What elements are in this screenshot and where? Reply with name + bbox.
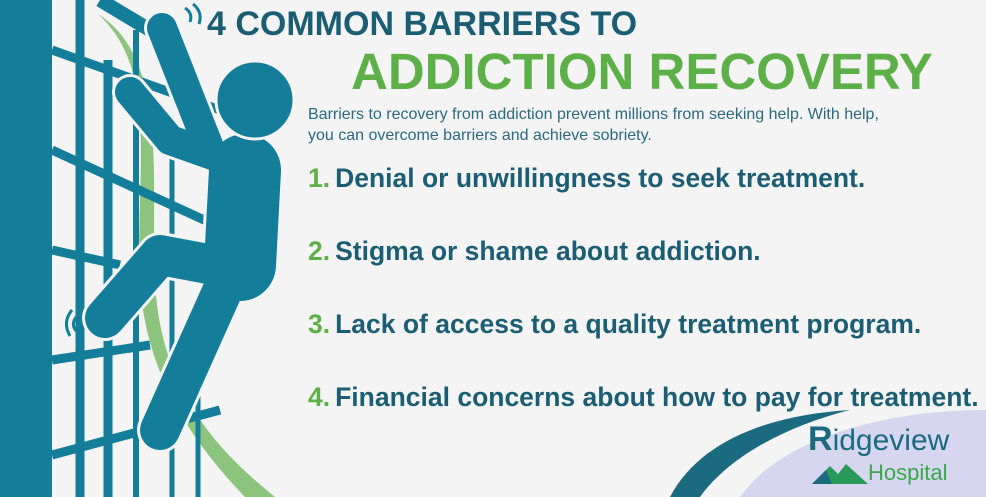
item 4: 4.Financial concerns about how to pay for treatment. bbox=[308, 382, 979, 412]
title line 2: ADDICTION RECOVERY bbox=[351, 43, 933, 100]
item 2: 2.Stigma or shame about addiction. bbox=[308, 236, 761, 266]
illustration: climber on wall bbox=[0, 0, 292, 497]
item 3: 3.Lack of access to a quality treatment program. bbox=[308, 309, 921, 339]
subtitle bbox=[308, 106, 879, 144]
logo bbox=[808, 420, 950, 485]
logo: Hospital bbox=[868, 460, 947, 485]
title line 1: 4 COMMON BARRIERS TO bbox=[207, 5, 637, 43]
bottom-right swoosh bbox=[670, 410, 986, 497]
subtitle: Barriers to recovery from addiction prevent millions from seeking help. With help, bbox=[308, 106, 879, 123]
wall pillar bbox=[0, 0, 52, 497]
subtitle: you can overcome barriers and achieve sobriety. bbox=[308, 127, 652, 144]
figure bbox=[105, 28, 245, 430]
item 1: 1.Denial or unwillingness to seek treatment. bbox=[308, 163, 865, 193]
green swoosh bbox=[98, 14, 275, 497]
logo: Ridgeview bbox=[808, 420, 949, 458]
